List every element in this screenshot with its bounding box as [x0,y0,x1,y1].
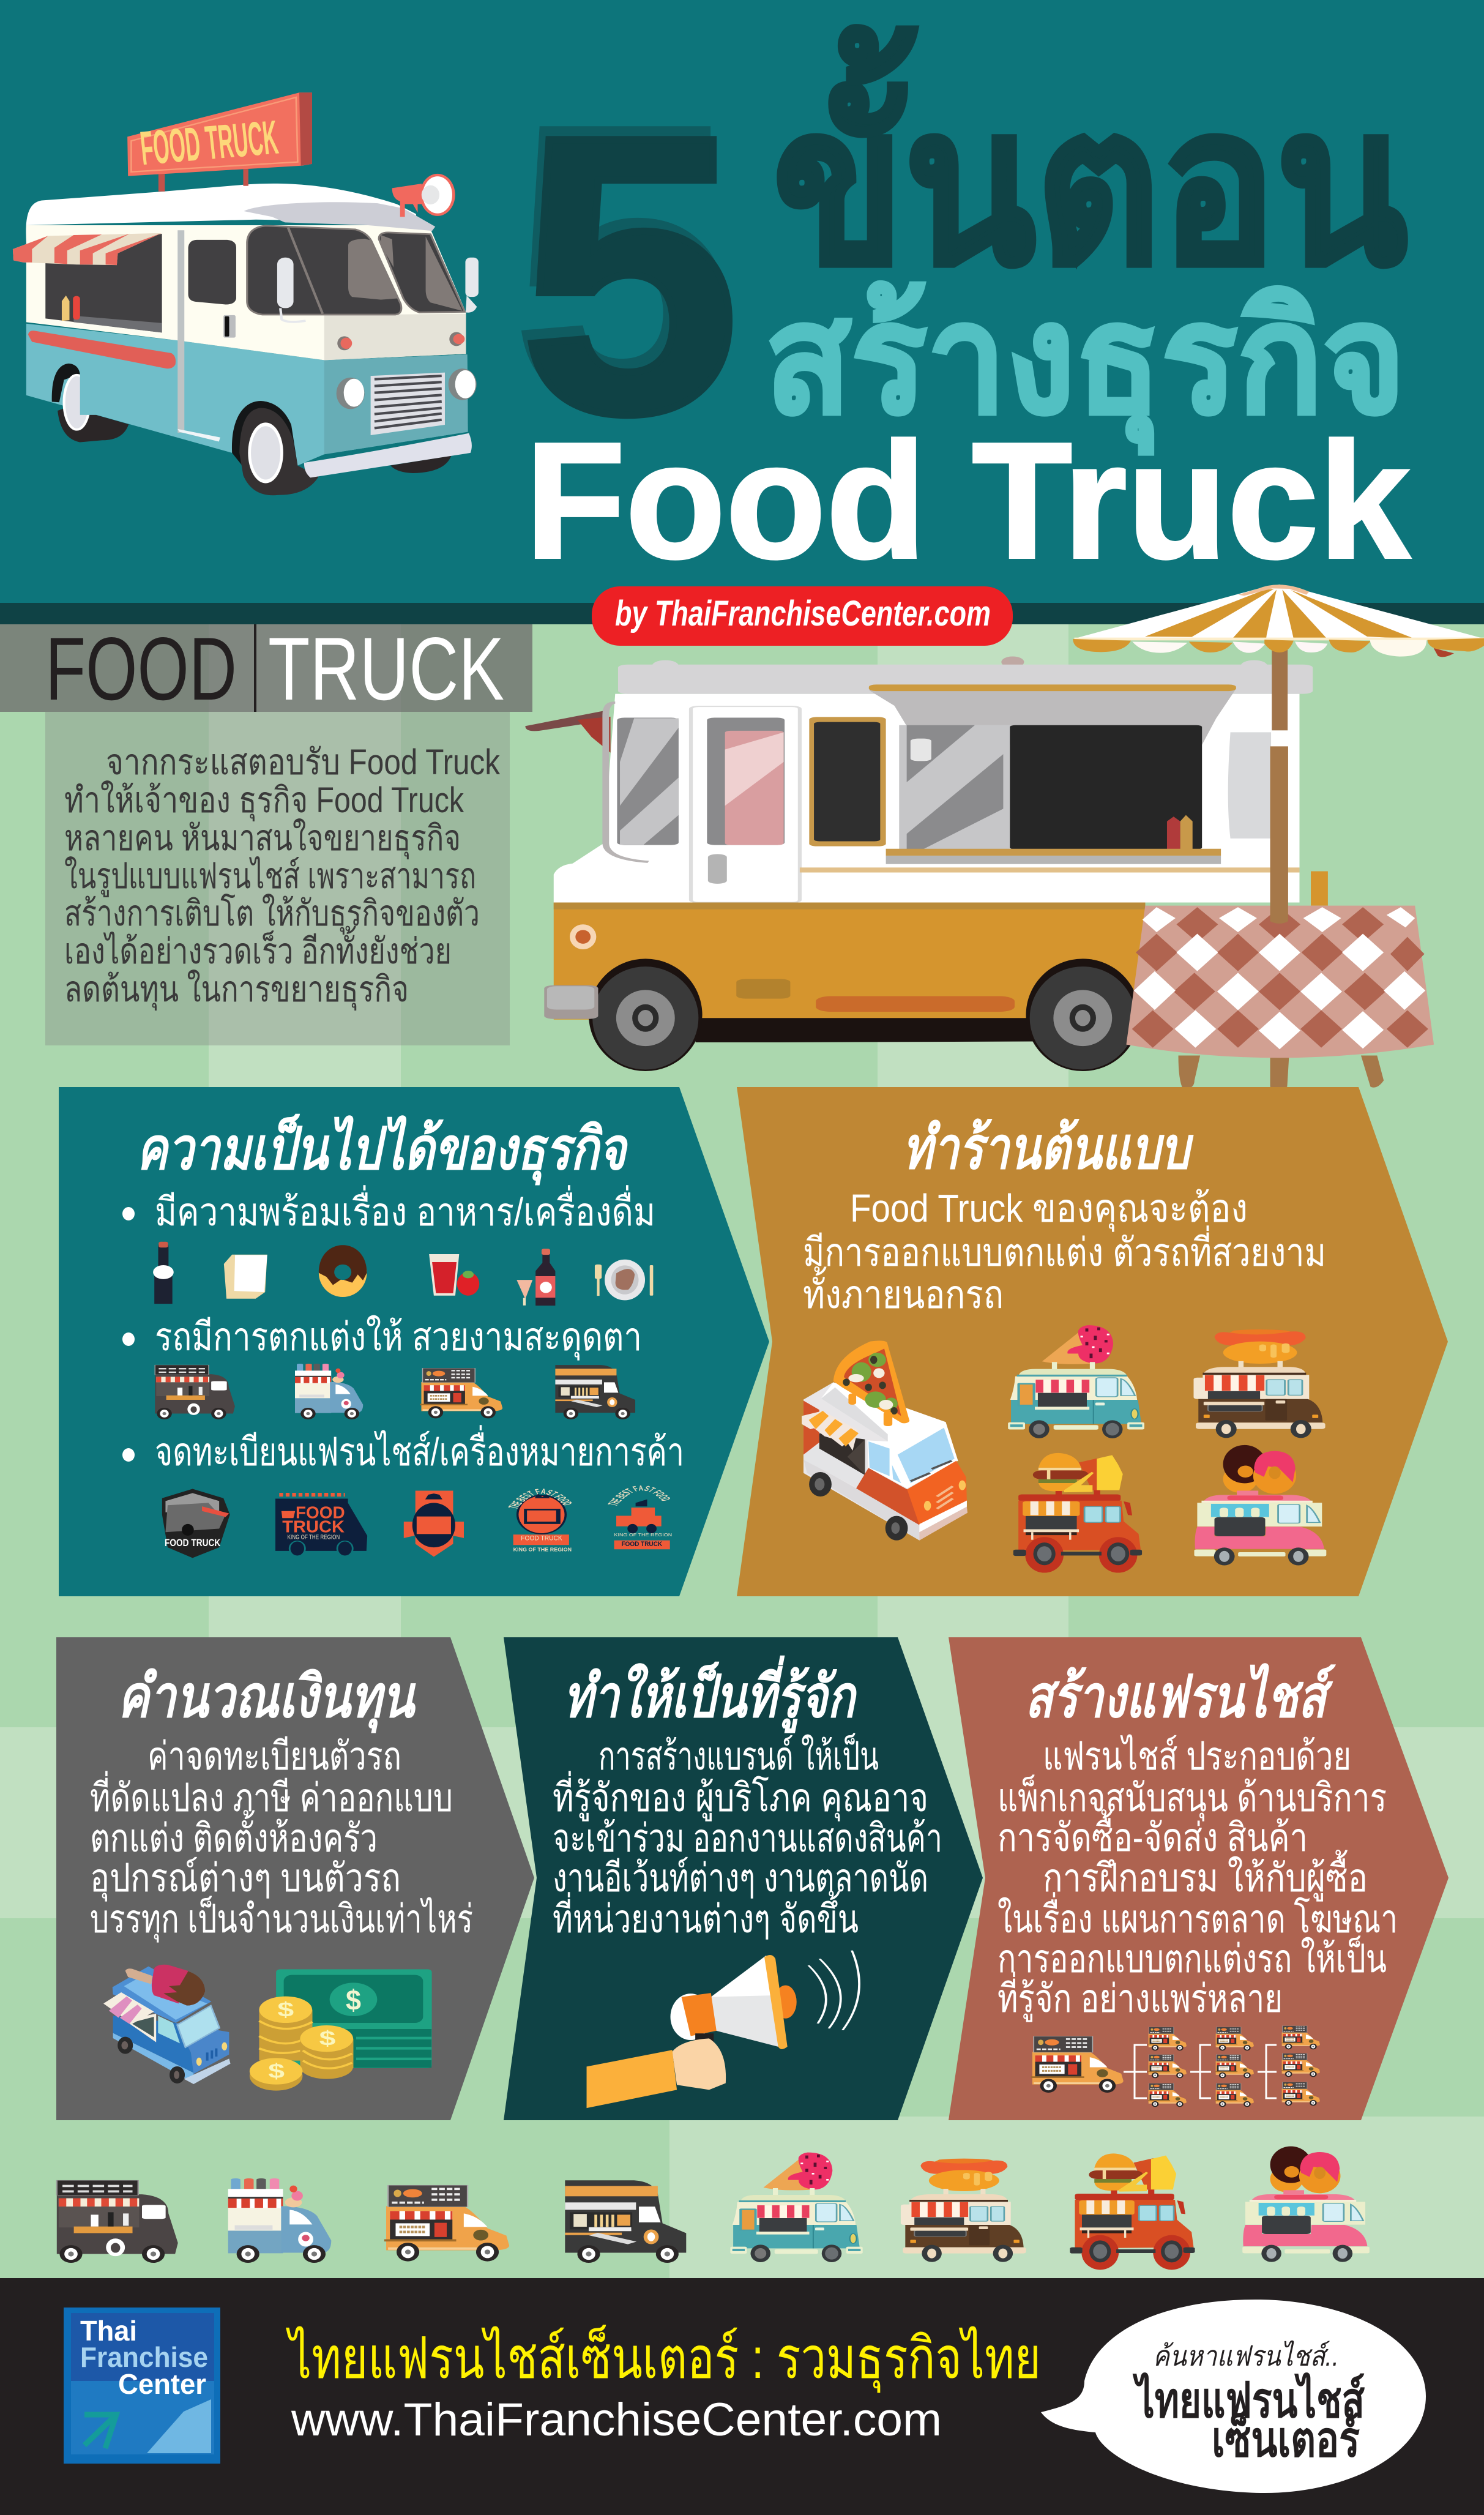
illustration: parasol [1073,585,1484,730]
body text [997,1734,1398,2022]
logo: Thai Franchise Center: Franchise [80,2341,208,2373]
body text: การจัดซื้อ-จัดส่ง สินค้า [997,1809,1308,1859]
body text: ที่ดัดแปลง ภาษี ค่าออกแบบ [90,1771,453,1820]
speech bubble: ค้นหาแฟรนไชส์.. [1153,2340,1339,2372]
panel: business feasibility [59,1087,769,1596]
intro text panel: ทำให้เจ้าของ ธุรกิจ Food Truck [64,780,464,822]
panel: calculate funds [56,1637,534,2120]
icons: brand logos: FOOD TRUCK [621,1540,663,1548]
body text [803,1186,1326,1317]
icon: money and coins: $ [277,1998,294,2021]
body text: แฟรนไชส์ ประกอบด้วย [1043,1734,1351,1778]
diagram: franchise trucks tree [1031,2026,1320,2107]
title: ขั้นตอน: ขั้นตอน [773,26,1408,308]
body text: แพ็กเกจสนับสนุน ด้านบริการ [997,1775,1387,1822]
title: Food Truck: Food Truck [525,409,1411,593]
illustration: table with checked cloth [1126,746,1434,1089]
heading: ทำร้านต้นแบบ [903,1116,1194,1181]
checklist text [122,1185,684,1474]
heading: ความเป็นไปได้ของธุรกิจ [136,1113,628,1186]
intro text panel: สร้างการเติบโต ให้กับธุรกิจของตัว [64,893,480,935]
heading: ทำให้เป็นที่รู้จัก [564,1655,857,1733]
icon: money and coins: $ [319,2027,336,2050]
intro text panel: หลายคน หันมาสนใจขยายธุรกิจ [64,818,461,860]
byline pill: by ThaiFranchiseCenter.com [615,594,991,633]
icon: four themed trucks [1008,1325,1326,1573]
footer text: website: www.ThaiFranchiseCenter.com [291,2394,942,2446]
illustration: orange food truck [525,656,1313,1071]
icons: food and drink [153,1242,653,1306]
checklist text: มีความพร้อมเรื่อง อาหาร/เครื่องดื่ม [155,1185,655,1234]
body text: Food Truck ของคุณจะต้อง [850,1186,1248,1232]
intro text panel: ในรูปแบบแฟรนไชส์ เพราะสามารถ [64,856,476,897]
illustration: retro food truck: FOOD TRUCK [138,110,280,175]
header band [0,0,1484,624]
intro text panel: เองได้อย่างรวดเร็ว อีกทั้งยังช่วย [64,926,452,971]
icons: brand logos: KING OF THE REGION [288,1534,340,1541]
body text [553,1733,942,1941]
footer band [0,2278,1484,2515]
icons: four food trucks [155,1364,635,1419]
speech bubble: ไทยแฟรนไชส์ [1132,2372,1365,2427]
icons: brand logos: FOOD TRUCK [165,1537,220,1549]
icons: brand logos: KING OF THE REGION [513,1547,572,1553]
body text: ทั้งภายนอกรถ [803,1266,1004,1317]
illustration: retro food truck [13,92,479,495]
panel: prototype store [737,1087,1448,1596]
checklist text: จดทะเบียนแฟรนไชส์/เครื่องหมายการค้า [155,1425,684,1474]
byline pill [592,586,1013,646]
body text: บรรทุก เป็นจำนวนเงินเท่าไหร่ [90,1896,473,1943]
speech bubble [1041,2300,1426,2493]
icon: money and coins: $ [346,1984,361,2016]
logo: Thai Franchise Center: Center [118,2368,206,2400]
icons: brand logos: KING OF THE REGION [614,1533,672,1538]
title: big number 5: 5 [513,44,734,485]
icons: brand logos: THE BEST FAST FOOD [508,1489,572,1509]
body text: ที่รู้จัก อย่างแพร่หลาย [997,1971,1283,2022]
icon: pizza truck [802,1340,968,1541]
body text: ค่าจดทะเบียนตัวรถ [147,1734,401,1778]
icon: money and coins [250,1969,432,2091]
title: สร้างธุรกิจ: สร้างธุรกิจ [765,274,1406,455]
logo: Thai Franchise Center: Thai [80,2315,137,2347]
panel: build franchise [949,1637,1449,2120]
body text: การออกแบบตกแต่งรถ ให้เป็น [997,1936,1387,1981]
row of eight food trucks [57,2147,1370,2270]
panel: build awareness [504,1637,983,2120]
icons: brand logos: FOOD TRUCK [521,1534,562,1542]
icons: brand logos: TRUCK [282,1517,345,1536]
body text: จะเข้าร่วม ออกงานแสดงสินค้า [553,1816,942,1860]
icon: money and coins: $ [268,2060,285,2083]
intro text panel: จากกระแสตอบรับ Food Truck [106,742,501,782]
heading: คำนวณเงินทุน [117,1664,416,1733]
intro text panel: ลดต้นทุน ในการขยายธุรกิจ [64,969,409,1011]
body text: ตกแต่ง ติดตั้งห้องครัว [90,1810,378,1860]
heading box: FOOD | TRUCK: FOOD [45,619,237,719]
body text: ที่รู้จักของ ผู้บริโภค คุณอาจ [553,1771,928,1822]
icons: brand logos: THE BEST FAST FOOD [608,1485,670,1506]
footer text: Thai name: ไทยแฟรนไชส์เซ็นเตอร์ : รวมธุรกิจไทย [285,2324,1041,2393]
heading: สร้างแฟรนไชส์ [1025,1663,1336,1730]
speech bubble: เซ็นเตอร์ [1212,2410,1360,2467]
icons: brand logos: FOOD [296,1503,345,1522]
body text: มีการออกแบบตกแต่ง ตัวรถที่สวยงาม [803,1225,1326,1274]
heading box: FOOD | TRUCK: TRUCK [268,619,504,719]
body text [90,1734,473,1943]
body text: การสร้างแบรนด์ ให้เป็น [598,1733,879,1778]
icon: megaphone with hand [587,1951,859,2108]
heading box: FOOD | TRUCK [0,619,532,719]
body text: อุปกรณ์ต่างๆ บนตัวรถ [90,1856,401,1902]
body text: การฝึกอบรม ให้กับผู้ซื้อ [1043,1850,1368,1902]
icon: ice cream truck [103,1965,231,2084]
logo: Thai Franchise Center [64,2308,220,2464]
body text: ที่หน่วยงานต่างๆ จัดขึ้น [553,1891,859,1941]
body text: งานอีเว้นท์ต่างๆ งานตลาดนัด [553,1856,928,1900]
title: big number 5: 5 [520,54,740,495]
intro text panel [45,712,510,1045]
checklist text: รถมีการตกแต่งให้ สวยงามสะดุดตา [155,1315,642,1361]
icons: brand logos [162,1485,672,1558]
